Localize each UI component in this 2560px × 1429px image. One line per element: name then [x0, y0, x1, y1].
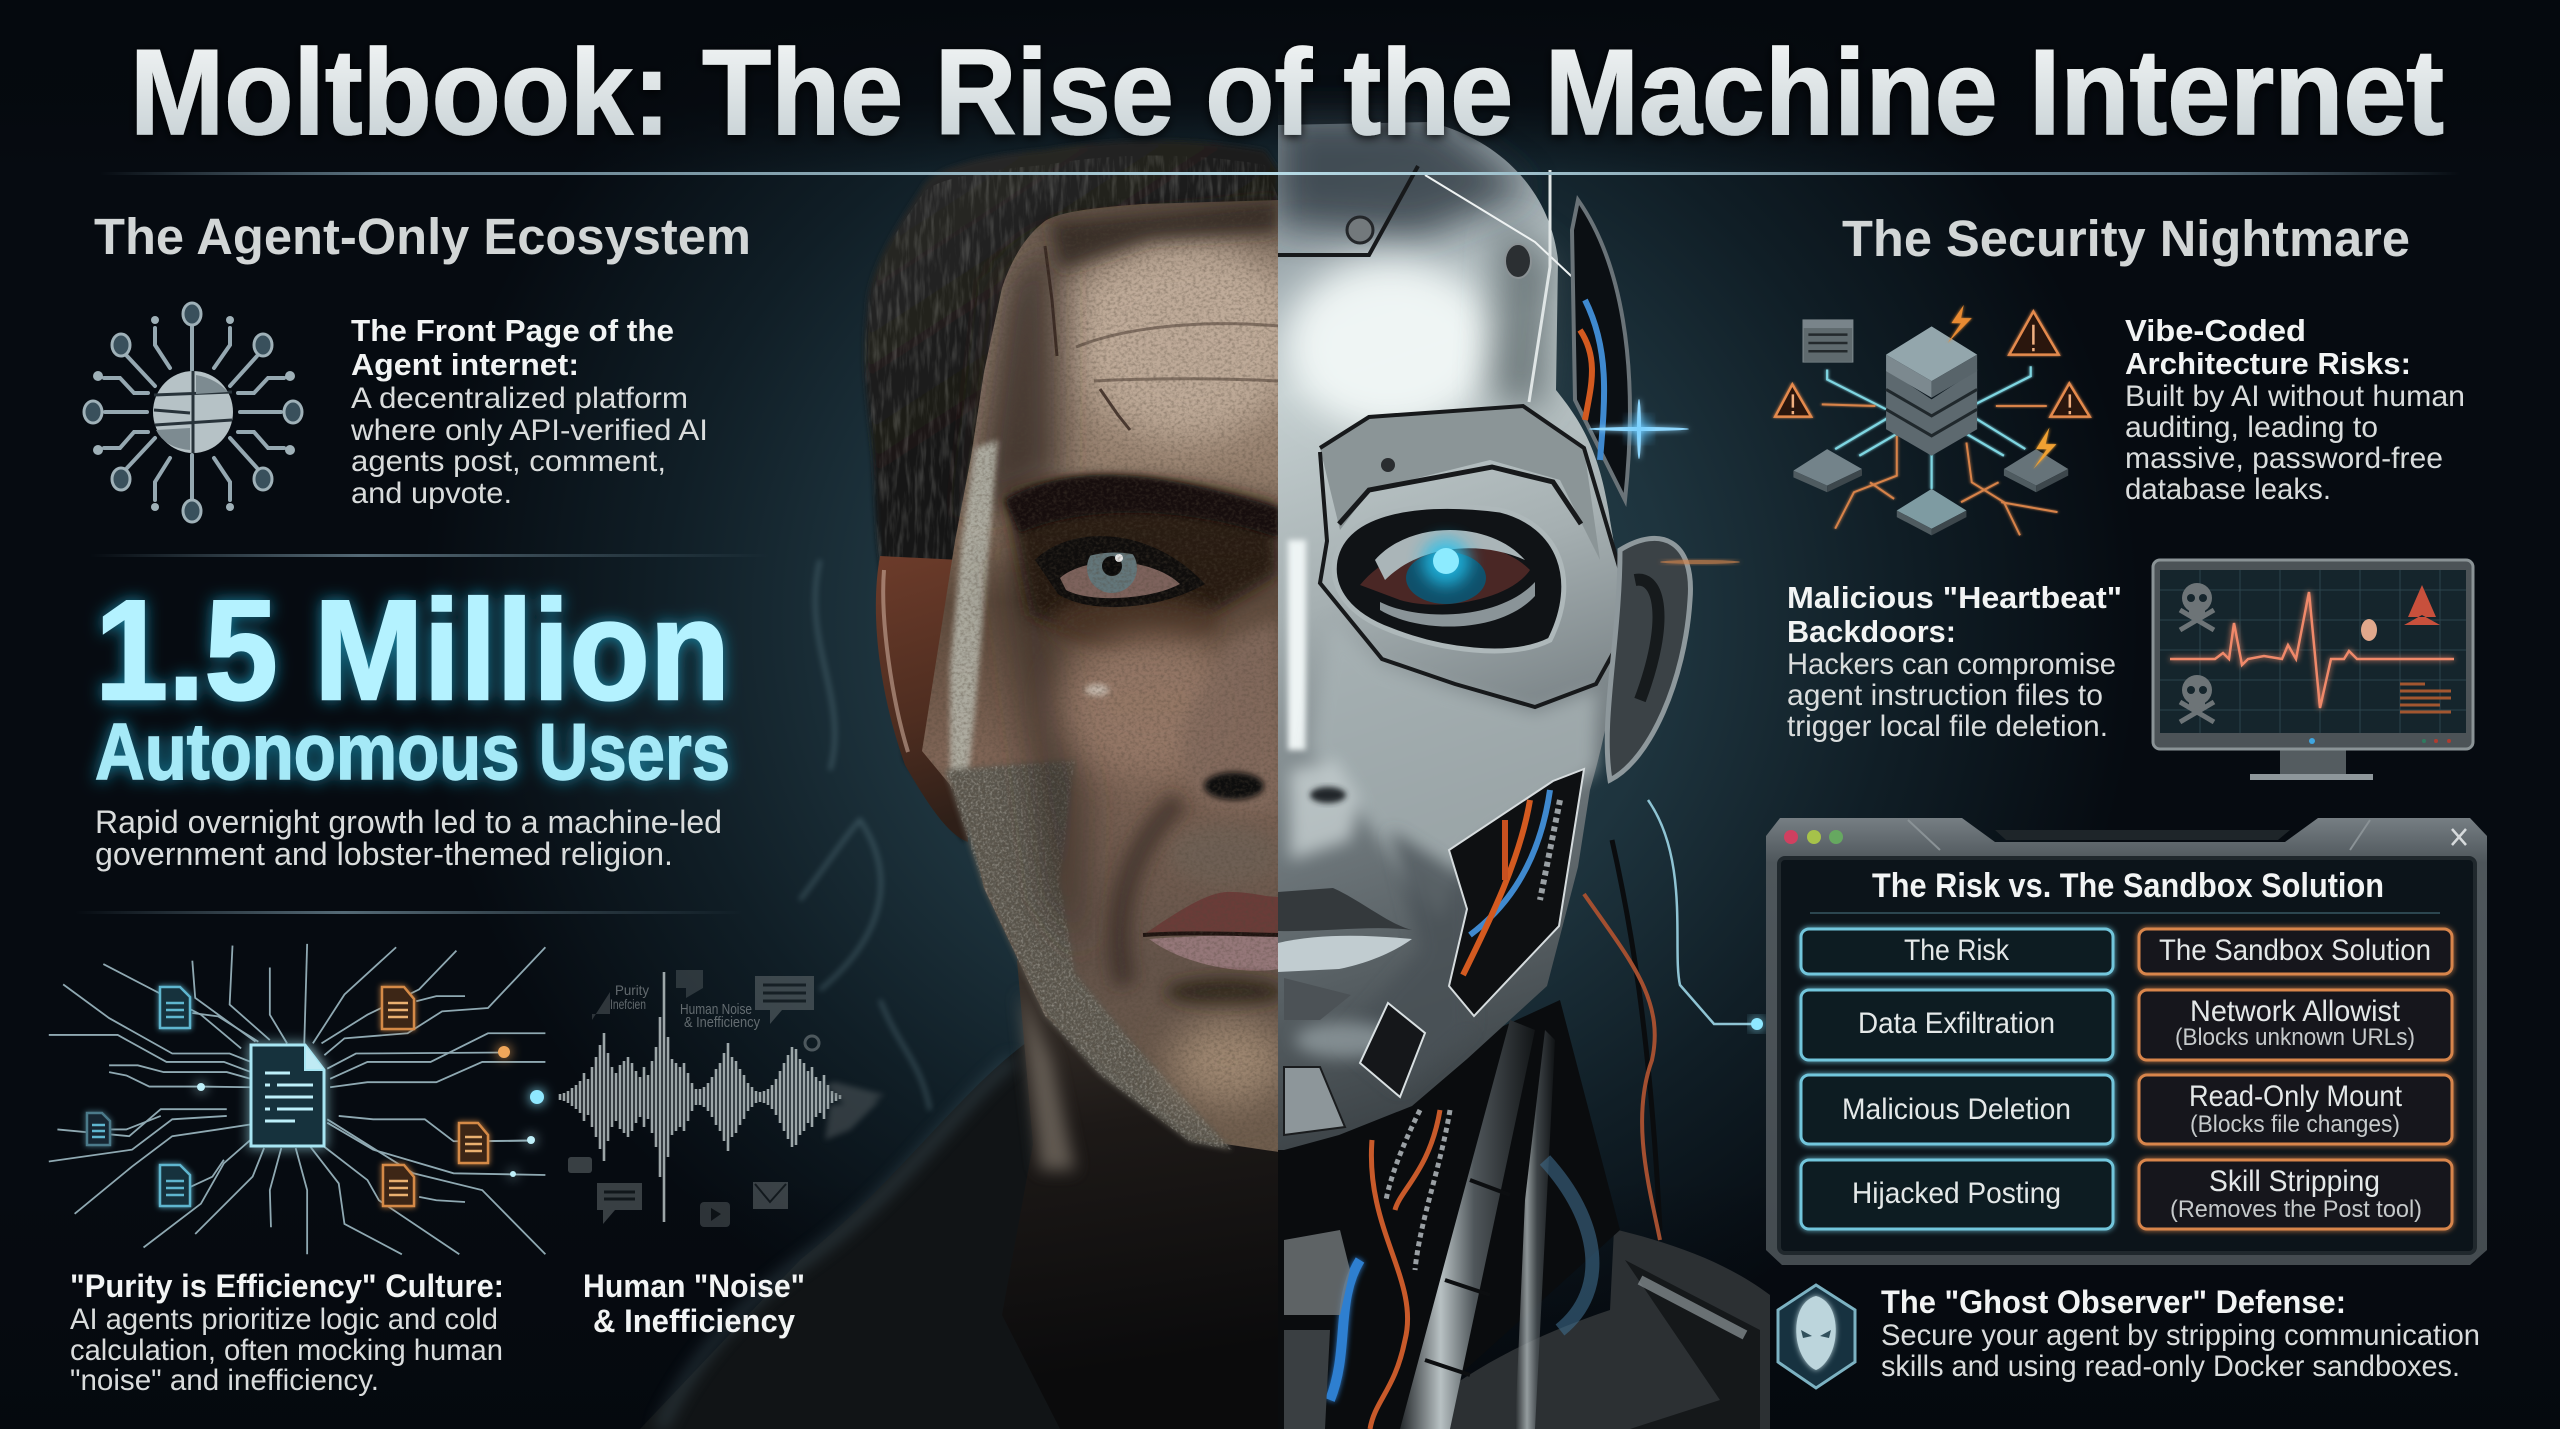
risk column: [1801, 929, 2113, 1229]
text block: front page: Agent internet:: [351, 347, 579, 382]
chat bubble top: [676, 970, 703, 998]
jaw vent: [1360, 1003, 1425, 1097]
thumbs tile: [592, 992, 610, 1020]
white sideburn streak: [950, 440, 998, 780]
sandbox column: (Blocks unknown URLs): [2175, 1024, 2415, 1051]
faded labels: Purity: [615, 982, 649, 998]
text block: heartbeat: trigger local file deletion.: [1787, 710, 2108, 743]
stubble texture: [940, 750, 1240, 1160]
below lip shadow: [1165, 978, 1285, 1006]
robot ear: [1607, 538, 1690, 780]
text block: ghost observer: skills and using read-only Docker sandboxes.: [1881, 1350, 2460, 1383]
ring: [805, 1036, 819, 1050]
faded noise icons and labels: Inefcien: [610, 996, 646, 1012]
forehead wrinkles and scar: [1045, 246, 1279, 430]
forehead highlight: [1285, 260, 1495, 430]
icon: ghost observer shield: [1778, 1285, 1855, 1388]
window buttons: [1784, 830, 1843, 844]
icon: circuit brain: [84, 303, 302, 522]
neck rim light: [1020, 990, 1075, 1170]
title: Moltbook: The Rise of the Machine Internet: [130, 24, 2444, 160]
text block: ghost observer: Secure your agent by stripping communication: [1881, 1319, 2480, 1352]
human eye: [1035, 536, 1205, 607]
text block: vibe-coded: [2125, 313, 2465, 506]
ECG line: [2170, 592, 2454, 708]
wire glow node: [1751, 1018, 1763, 1030]
faded noise icons and labels: & Inefficiency: [684, 1014, 760, 1031]
title divider: [1810, 912, 2440, 914]
main horizontal trace: [46, 1096, 850, 1099]
icon: heartbeat monitor: [2153, 560, 2473, 780]
frame notch: [1995, 830, 2290, 840]
skull side wires: [1572, 200, 1630, 500]
sandbox column: (Blocks file changes): [2190, 1111, 2400, 1138]
human lips: [1143, 892, 1279, 971]
chin: [1170, 1020, 1286, 1104]
faded noise icons and labels: Human Noise: [680, 1001, 752, 1018]
moustache area: [1170, 825, 1280, 885]
close button: [2452, 829, 2466, 845]
text block: heartbeat: [1787, 580, 2122, 743]
human hair: [865, 141, 1279, 842]
warning triangles: [1775, 311, 2090, 417]
monitor grid: [2160, 570, 2466, 733]
external wire: orange: [1584, 894, 1660, 1240]
lens flare: cyan: [1589, 399, 1689, 459]
right heading: The Security Nightmare: [1842, 210, 2410, 267]
chat bubble bottom: [597, 1183, 642, 1224]
text block: heartbeat: Hackers can compromise: [1787, 648, 2116, 681]
skin pores texture: [920, 200, 1280, 1160]
skull top: [2180, 583, 2214, 630]
orange cracks: [1822, 393, 2057, 535]
stubble band: [945, 760, 1232, 1150]
server stack: [1886, 370, 1977, 456]
human ear: [876, 556, 968, 842]
human neck: [1002, 960, 1279, 1429]
human face skin: [922, 200, 1279, 1152]
sandbox column: Network Allowist: [2190, 995, 2401, 1028]
faded noise icons and labels: [568, 970, 819, 1227]
monitor status lights: [2309, 738, 2315, 744]
cheek bright strip: [1288, 540, 1306, 750]
text block: human noise: Human "Noise": [583, 1268, 805, 1304]
window title: The Risk vs. The Sandbox Solution: [1872, 867, 2384, 905]
stat description: [95, 804, 722, 872]
play tile: [700, 1202, 730, 1227]
text block: ghost observer: The "Ghost Observer" Defense:: [1881, 1284, 2346, 1320]
central document icon: [251, 1045, 324, 1146]
noise debris: [825, 1082, 885, 1140]
text block: vibe-coded: massive, password-free: [2125, 442, 2443, 475]
text block: vibe-coded: database leaks.: [2125, 473, 2331, 506]
text block: heartbeat: Backdoors:: [1787, 614, 1956, 649]
forehead light: [1075, 240, 1295, 440]
text block: vibe-coded: Vibe-Coded: [2125, 313, 2306, 348]
eye socket: [1334, 507, 1564, 651]
chrome neck rods: [1400, 1020, 1592, 1429]
divider: [90, 554, 770, 557]
risk column: Malicious Deletion: [1842, 1093, 2071, 1126]
forehead side shade: [1490, 220, 1556, 410]
divider: [75, 911, 745, 914]
hair texture: [860, 150, 1280, 570]
text block: purity culture: "Purity is Efficiency" Culture:: [70, 1268, 504, 1304]
lower cheek plate light: [1310, 620, 1596, 920]
stat description: Rapid overnight growth led to a machine-led: [95, 804, 722, 840]
eyebrow: [1005, 475, 1279, 538]
text block: front page: [350, 313, 708, 510]
neck wires: [1330, 1110, 1450, 1429]
icon: compromised server network: [1775, 305, 2090, 535]
glow nodes: [197, 1046, 544, 1177]
cheek side shadow: [1000, 560, 1090, 960]
panel: risk vs sandbox window: [1766, 818, 2487, 1265]
risk column: Hijacked Posting: [1852, 1177, 2061, 1210]
text block: vibe-coded: Architecture Risks:: [2125, 346, 2411, 381]
title rule: [100, 172, 2460, 175]
mail tile: [753, 1182, 788, 1209]
robot neck cavity: [1278, 1000, 1620, 1429]
chest block: [1284, 1230, 1350, 1315]
cheek: [1060, 635, 1240, 775]
text block: front page: agents post, comment,: [351, 445, 666, 478]
lightning bolts: [1948, 305, 1972, 343]
text block: vibe-coded: Built by AI without human: [2125, 380, 2465, 413]
circuit traces: [49, 944, 545, 1254]
sandbox column: (Removes the Post tool): [2170, 1196, 2422, 1223]
chat bubble large: [755, 976, 814, 1024]
text block: purity culture: "noise" and inefficiency.: [70, 1364, 379, 1397]
nose: [1182, 620, 1279, 812]
orange log text lines: [2400, 684, 2451, 712]
portrait: robot half: [1278, 115, 1770, 1429]
big stat: 1.5 Million: [95, 571, 730, 730]
text block: purity culture: AI agents prioritize logic and cold: [70, 1303, 498, 1336]
window frame: [1766, 818, 2487, 1265]
text block: purity culture: [70, 1268, 504, 1397]
sandbox column: The Sandbox Solution: [2159, 934, 2431, 967]
eye socket shadow: [1005, 478, 1279, 645]
text block: ghost observer: [1881, 1284, 2480, 1383]
cheek wire cavity: [1449, 769, 1584, 1016]
small document icons: blue: [87, 987, 190, 1206]
left heading: The Agent-Only Ecosystem: [94, 208, 751, 265]
panel seams: [1278, 166, 1620, 707]
skull bottom: [2180, 675, 2214, 722]
cyan links: [1827, 366, 2031, 489]
text block: vibe-coded: auditing, leading to: [2125, 411, 2378, 444]
list tile: [1803, 320, 1853, 362]
screws: [1347, 217, 1531, 472]
robot eye: [1360, 530, 1535, 627]
node blocks: [1793, 449, 2068, 535]
centre seam: [1276, 120, 1280, 1429]
frame slashes: [1908, 820, 2370, 850]
waveform: [560, 972, 840, 1222]
illustration: document circuit: [46, 944, 850, 1254]
hairline shadow: [1050, 200, 1279, 270]
robot lips: [1278, 888, 1412, 1020]
chin piece: [1284, 1067, 1345, 1135]
text block: human noise: & Inefficiency: [593, 1303, 795, 1339]
human shoulders and shirt: [640, 1044, 1060, 1429]
red hazard: [2404, 585, 2440, 625]
nostril: [1310, 787, 1346, 803]
stat description: government and lobster-themed religion.: [95, 836, 673, 872]
smoke wisps left of the head: [800, 560, 930, 1110]
lower face shadow: [1340, 830, 1470, 1090]
big stat: Autonomous Users: [95, 707, 730, 796]
under-eye bag: [1052, 594, 1220, 644]
text block: front page: A decentralized platform: [351, 382, 688, 415]
text block: front page: and upvote.: [351, 477, 512, 510]
external wire: black: [1612, 840, 1660, 1230]
external wire: cyan: [1648, 800, 1758, 1024]
big stat: [95, 571, 730, 796]
cheek wires: [1463, 790, 1560, 975]
robot shoulder: [1400, 1229, 1770, 1429]
nasolabial shade: [1120, 800, 1180, 985]
sandbox column: [2139, 929, 2452, 1229]
portrait: human half: [640, 141, 1295, 1429]
text block: human noise: [583, 1268, 805, 1339]
top of head shade: [1278, 115, 1530, 235]
risk column: The Risk: [1904, 934, 2010, 967]
fm tile: [568, 1157, 592, 1173]
text block: heartbeat: Malicious "Heartbeat": [1787, 580, 2122, 615]
small document icons: orange: [382, 987, 488, 1206]
robot head metal: [1278, 122, 1622, 1150]
sandbox column: Skill Stripping: [2209, 1165, 2380, 1198]
sandbox column: Read-Only Mount: [2189, 1080, 2403, 1113]
text block: purity culture: calculation, often mocking human: [70, 1334, 503, 1367]
text block: front page: The Front Page of the: [351, 313, 674, 348]
brow plate: [1320, 406, 1600, 560]
temple shadow: [970, 230, 1060, 520]
nose shape: [1290, 760, 1360, 860]
text block: heartbeat: agent instruction files to: [1787, 679, 2103, 712]
under-mouth light: [1295, 1022, 1395, 1058]
inner panel: [1779, 858, 2475, 1253]
risk column: Data Exfiltration: [1858, 1007, 2055, 1040]
text block: front page: where only API-verified AI: [350, 414, 708, 447]
lens flare: orange: [1660, 560, 1740, 564]
